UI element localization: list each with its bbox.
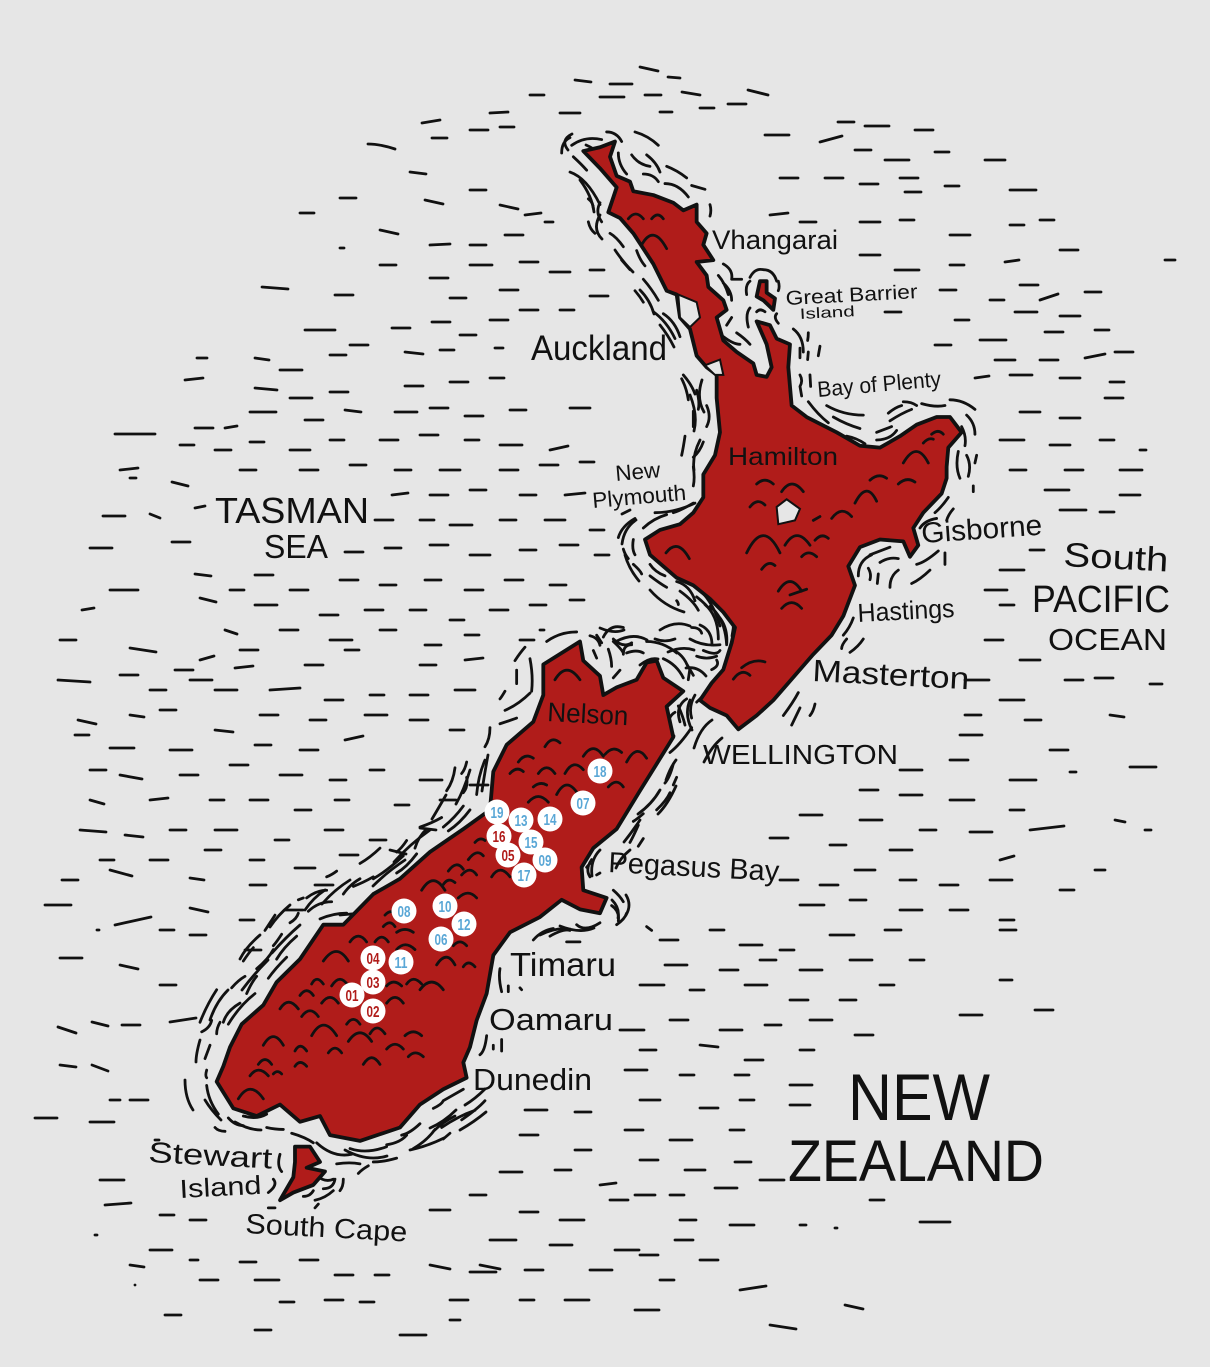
numbered location markers: 08 bbox=[398, 904, 411, 921]
label: South: South bbox=[1063, 536, 1169, 579]
south island bbox=[217, 641, 683, 1200]
numbered location markers: 11 bbox=[394, 955, 408, 972]
north island bbox=[583, 141, 962, 729]
numbered location markers: 17 bbox=[518, 868, 531, 885]
north island coastal ripples bbox=[562, 132, 977, 725]
south island landmass bbox=[217, 641, 683, 1141]
extra coastal ripples bbox=[185, 134, 734, 1158]
great barrier island bbox=[757, 281, 775, 310]
label: Pacific: PACIFIC bbox=[1032, 579, 1170, 621]
label: Nelson: Nelson bbox=[547, 697, 629, 731]
label: Timaru: Timaru bbox=[510, 946, 616, 983]
label: Stewart: Stewart bbox=[148, 1137, 273, 1175]
label: Auckland: Auckland bbox=[531, 329, 667, 368]
numbered location markers: 02 bbox=[366, 1004, 380, 1021]
numbered location markers: 01 bbox=[346, 988, 359, 1005]
title: New Zealand: NEW bbox=[848, 1060, 991, 1134]
label: Great Barrier Island: Great Barrier bbox=[785, 281, 918, 310]
label: South Cape: South Cape bbox=[245, 1208, 408, 1247]
label: Gisborne: Gisborne bbox=[920, 510, 1043, 550]
label: New: New bbox=[614, 457, 661, 486]
lake taupo bbox=[777, 499, 800, 524]
south island mountains bbox=[238, 670, 647, 1099]
numbered location markers: 05 bbox=[502, 848, 515, 865]
auckland harbour inlets bbox=[678, 295, 723, 375]
label: Pegasus Bay: Pegasus Bay bbox=[608, 847, 781, 888]
numbered location markers: 12 bbox=[458, 917, 471, 934]
label: Dunedin: Dunedin bbox=[473, 1062, 592, 1097]
place labels bbox=[148, 225, 1170, 1247]
numbered location markers: 10 bbox=[438, 899, 452, 916]
title: New Zealand: ZEALAND bbox=[788, 1129, 1044, 1194]
numbered location markers: 06 bbox=[434, 932, 448, 949]
label: Whangarei: Vhangarai bbox=[712, 225, 838, 255]
numbered location markers bbox=[340, 758, 612, 1024]
numbered location markers: 15 bbox=[524, 835, 538, 852]
label: Masterton: Masterton bbox=[812, 653, 970, 696]
label: Wellington: WELLINGTON bbox=[703, 739, 898, 770]
stewart island bbox=[280, 1147, 325, 1200]
label: Ocean: OCEAN bbox=[1048, 622, 1167, 657]
title: New Zealand bbox=[788, 1060, 1044, 1194]
numbered location markers: 13 bbox=[514, 813, 528, 830]
label: Tasman: TASMAN bbox=[215, 490, 369, 531]
north island mountains bbox=[628, 214, 943, 679]
numbered location markers: 14 bbox=[544, 812, 557, 829]
south island coastal ripples bbox=[200, 632, 695, 1208]
numbered location markers: 03 bbox=[366, 975, 380, 992]
numbered location markers: 07 bbox=[576, 796, 590, 813]
label: Oamaru: Oamaru bbox=[489, 1002, 613, 1037]
numbered location markers: 18 bbox=[594, 764, 607, 781]
label: Hastings: Hastings bbox=[857, 593, 955, 628]
label: Plymouth: Plymouth bbox=[591, 480, 687, 513]
label: Sea: SEA bbox=[264, 528, 328, 565]
north island landmass bbox=[583, 141, 962, 729]
numbered location markers: 09 bbox=[538, 853, 552, 870]
label: Island: Island bbox=[799, 303, 855, 323]
label: Island: Island bbox=[179, 1170, 262, 1204]
numbered location markers: 04 bbox=[366, 951, 380, 968]
numbered location markers: 19 bbox=[490, 805, 504, 822]
label: Bay of Plenty: Bay of Plenty bbox=[816, 366, 942, 402]
label: Hamilton: Hamilton bbox=[728, 443, 838, 471]
numbered location markers: 16 bbox=[492, 829, 506, 846]
